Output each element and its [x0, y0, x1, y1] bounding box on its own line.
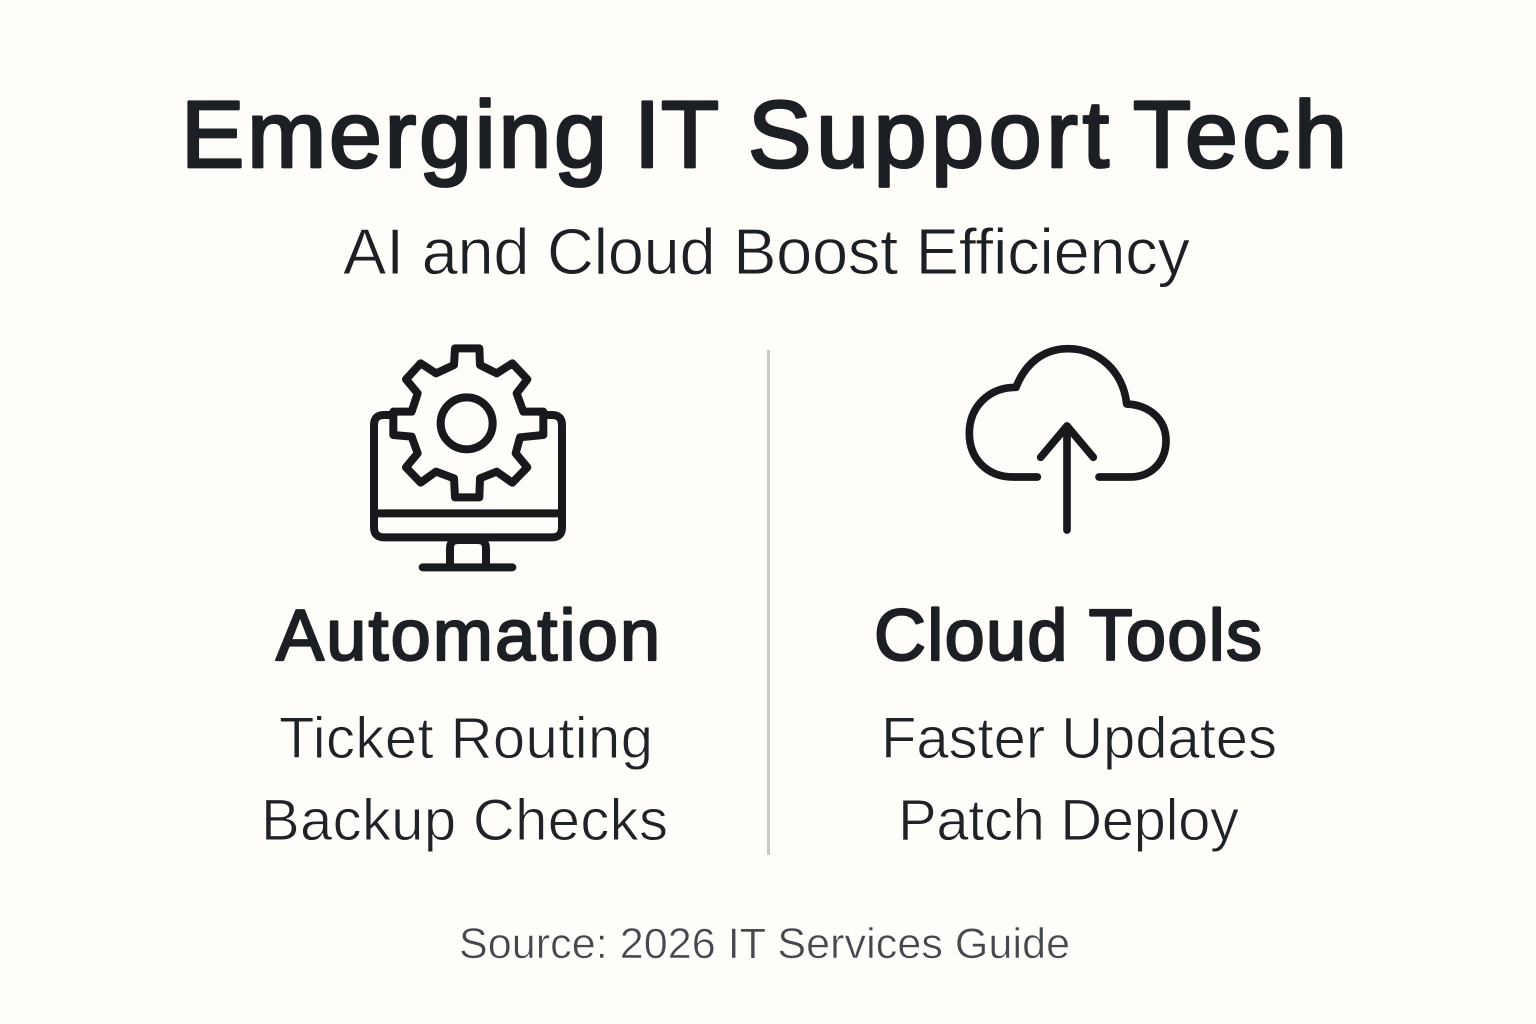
item: faster updates: Faster Updates — [881, 706, 1277, 771]
divider — [767, 350, 770, 855]
icon: monitor with gear — [374, 348, 562, 567]
title — [181, 82, 1347, 188]
subtitle: AI and Cloud Boost Efficiency — [343, 215, 1190, 288]
item: patch deploy: Patch Deploy — [898, 788, 1239, 853]
panel: automation — [261, 348, 668, 853]
source note: Source: 2026 IT Services Guide — [459, 920, 1070, 968]
title: IT — [634, 82, 719, 188]
item: ticket routing: Ticket Routing — [279, 706, 653, 771]
heading: automation: Automation — [276, 596, 660, 676]
title: Support — [748, 82, 1109, 188]
title: Tech — [1133, 82, 1347, 188]
icon: cloud upload — [969, 349, 1166, 530]
item: backup checks: Backup Checks — [261, 788, 668, 853]
title: Emerging — [181, 82, 607, 188]
panel: cloud tools — [874, 349, 1277, 853]
heading: cloud tools: Cloud Tools — [874, 596, 1262, 676]
